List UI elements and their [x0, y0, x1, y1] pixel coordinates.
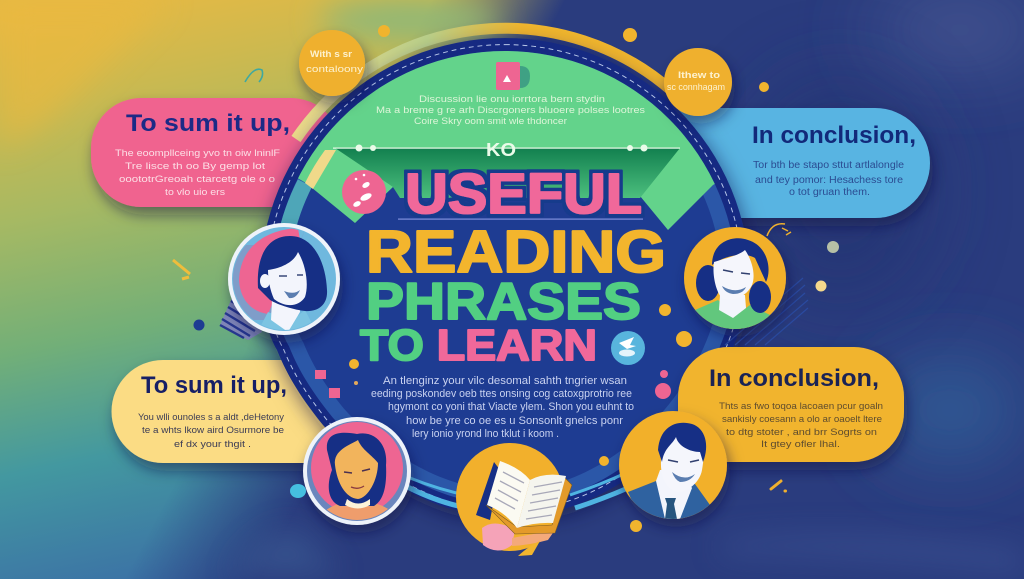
title line: useful: USEFUL: [405, 162, 642, 225]
icon: pink book: [496, 62, 530, 90]
center body text: how be yre co oe es u Sonsonlt gnelcs ponr: [406, 415, 623, 427]
panel: orange callout: [678, 347, 904, 462]
intro text: Coire Skry oom smit wle thdoncer: [414, 116, 567, 127]
outer yellow arc: [296, 28, 672, 139]
icon: blue circle: [611, 331, 645, 365]
heading: To sum it up,: [141, 372, 287, 399]
main circle: [250, 0, 770, 515]
body: Tre lisce th oo By gemp lot: [125, 161, 265, 172]
center body text: An tlenginz your vilc desomal sahth tngrier wsan: [383, 375, 627, 387]
title: [360, 162, 666, 370]
portrait: left woman: [228, 223, 340, 335]
body: Thts as fwo toqoa lacoaen pcur goaln: [719, 401, 883, 412]
body: [753, 160, 904, 198]
dark ring: [260, 38, 750, 515]
icon: open book: [456, 443, 572, 556]
icon: stripes right: [725, 278, 808, 345]
panel: green intro: [333, 62, 680, 160]
fold shadow: [335, 148, 680, 198]
intro text: Ma a breme g re arh Discrgoners bluoere polses lootres: [376, 105, 645, 116]
body: It gtey ofler lhal.: [761, 439, 840, 450]
bubble: top right: Ithew to: [678, 70, 720, 81]
bubble: top left: With s sr: [310, 49, 352, 60]
center body text: [371, 375, 634, 440]
body: and tey pomor: Hesachess tore: [755, 175, 903, 186]
body: to vlo uio ers: [165, 187, 225, 198]
green dome: [298, 51, 715, 230]
decoration: squiggle: [767, 224, 791, 236]
center body text: hgymont co yoni that Viacte ylem. Shon you euhnt to: [388, 401, 634, 413]
body: Tor bth be stapo sttut artlalongle: [753, 160, 904, 171]
body: [138, 412, 284, 450]
portrait: man: [619, 411, 727, 519]
bubble: top right: sc connhagam: [667, 82, 725, 93]
inner lighter blue band: [273, 51, 737, 503]
heading: To sum it up,: [126, 110, 290, 137]
bottom swoosh light blue: [400, 483, 628, 510]
body: te a whts lkow aird Osurmore be: [142, 425, 284, 436]
panel: yellow callout: [112, 360, 350, 463]
title line: to learn: TO LEARN: [360, 321, 597, 370]
portrait: bottom woman: [303, 417, 411, 525]
dashed stitch ring: [267, 45, 743, 509]
icon: pink circle: [342, 170, 386, 214]
underline: [398, 218, 643, 220]
body: o tot gruan them.: [789, 187, 870, 198]
icon: stripes left: [220, 298, 262, 340]
body: You wlli ounoles s a aldt ,deHetony: [138, 412, 284, 423]
hand: [482, 523, 515, 550]
body: ef dx your thgit .: [174, 439, 251, 450]
inner blue field: [288, 66, 722, 488]
body: to dtg stoter , and brr Sogrts on: [726, 427, 877, 438]
heading: In conclusion,: [709, 365, 879, 392]
portrait: right woman: [684, 227, 786, 345]
body: ooototrGreoah ctarcetg ole o o: [119, 174, 275, 185]
center body text: eeding poskondev oeb ttes onsing cog catoxgprotrio ree: [371, 388, 632, 400]
heading: In conclusion,: [752, 122, 916, 149]
bottom swoosh upper line: [410, 472, 628, 496]
body: sankisly coesann a olo ar oaoelt ltere: [722, 414, 882, 425]
title line: reading: READING: [366, 219, 666, 285]
body: [115, 148, 280, 198]
bubble: top right: [664, 48, 732, 116]
KO mark: KO: [486, 140, 516, 160]
center body text: lery ionio yrond lno tklut i koom .: [412, 428, 559, 440]
bubble: top left: contaloony: [306, 64, 363, 75]
title line: phrases: PHRASES: [366, 273, 641, 331]
bubble: top left: [299, 30, 365, 96]
intro text: Discussion lie onu iorrtora bern stydin: [419, 94, 605, 105]
decorative dots: [173, 25, 839, 532]
body: The eoompllceing yvo tn oiw lninlF: [115, 148, 280, 159]
panel: blue callout: [660, 108, 930, 218]
panel: pink callout: [91, 98, 341, 207]
body: [719, 401, 883, 450]
intro text: [376, 94, 645, 127]
divider with dots: [333, 144, 680, 152]
inner band teal: [285, 183, 305, 240]
